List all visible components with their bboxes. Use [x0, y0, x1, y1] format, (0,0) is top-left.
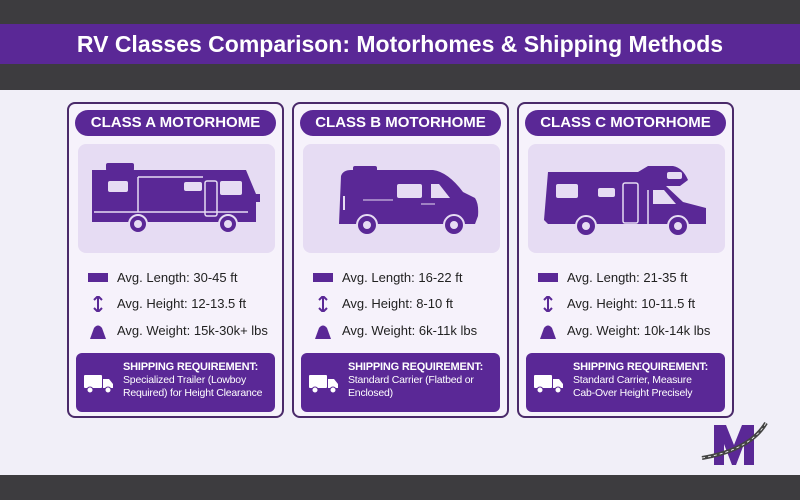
- heading: class C: CLASS C MOTORHOME: [540, 114, 711, 131]
- title: [0, 24, 800, 64]
- title: RV Classes Comparison: Motorhomes & Shipping Methods: [77, 31, 723, 57]
- stat: height: Avg. Height: 12-13.5 ft: [117, 296, 246, 311]
- heading: class A: [75, 110, 276, 136]
- shipping requirement: Required) for Height Clearance: [123, 387, 262, 399]
- stat: length: Avg. Length: 30-45 ft: [117, 270, 237, 285]
- icon: class B van: [303, 144, 500, 253]
- shipping requirement: SHIPPING REQUIREMENT:: [123, 361, 258, 373]
- heading: class B: [300, 110, 501, 136]
- stat: height: Avg. Height: 10-11.5 ft: [567, 296, 695, 311]
- stat: weight: Avg. Weight: 6k-11k lbs: [342, 323, 477, 338]
- shipping requirement: [301, 353, 500, 412]
- panel: class C: [517, 102, 734, 418]
- shipping requirement: Specialized Trailer (Lowboy: [123, 374, 246, 386]
- stat: weight: Avg. Weight: 15k-30k+ lbs: [117, 323, 268, 338]
- shipping requirement: SHIPPING REQUIREMENT:: [573, 361, 708, 373]
- panel: class A: [67, 102, 284, 418]
- shipping requirement: [526, 353, 725, 412]
- logo: [702, 422, 768, 465]
- shipping requirement: [76, 353, 275, 412]
- shipping requirement: Cab-Over Height Precisely: [573, 387, 692, 399]
- stat: length: Avg. Length: 16-22 ft: [342, 270, 462, 285]
- heading: class A: CLASS A MOTORHOME: [91, 114, 260, 131]
- stat: height: Avg. Height: 8-10 ft: [342, 296, 453, 311]
- stat: length: Avg. Length: 21-35 ft: [567, 270, 687, 285]
- panel: class B: [292, 102, 509, 418]
- icon: class A motorhome: [78, 144, 275, 253]
- heading: class C: [525, 110, 726, 136]
- shipping requirement: Enclosed): [348, 387, 393, 399]
- shipping requirement: Standard Carrier (Flatbed or: [348, 374, 474, 386]
- stat: weight: Avg. Weight: 10k-14k lbs: [567, 323, 710, 338]
- icon: class C motorhome: [528, 144, 725, 253]
- shipping requirement: Standard Carrier, Measure: [573, 374, 692, 386]
- heading: class B: CLASS B MOTORHOME: [315, 114, 486, 131]
- shipping requirement: SHIPPING REQUIREMENT:: [348, 361, 483, 373]
